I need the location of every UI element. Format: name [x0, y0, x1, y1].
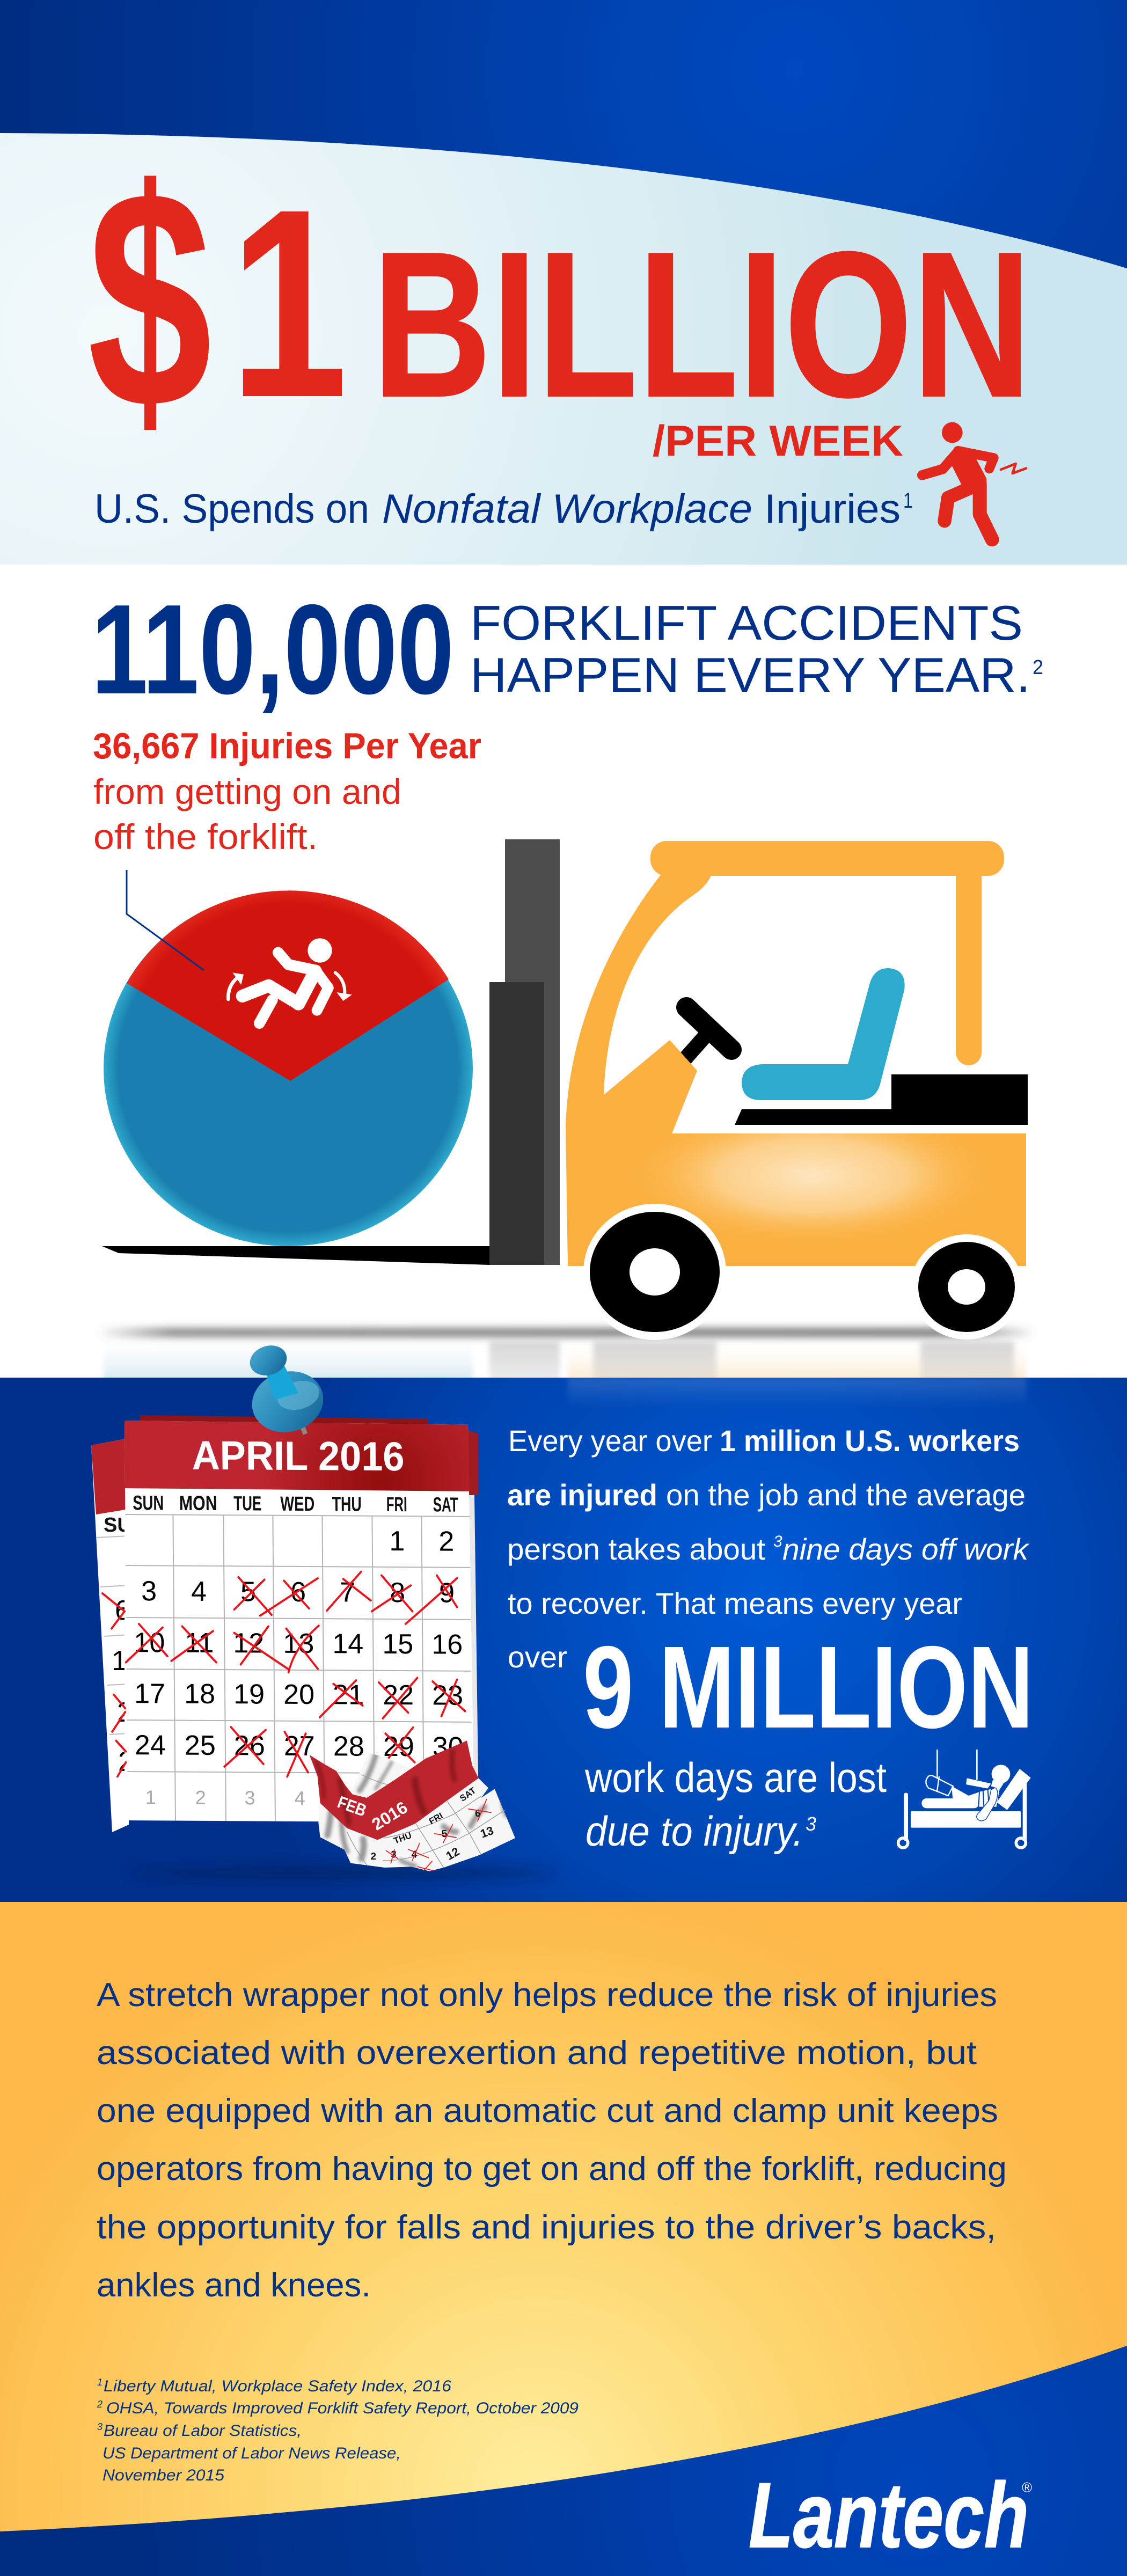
text: every year over 1 million workers: person takes about [507, 1532, 765, 1566]
crumpled page labels: 3 [391, 1849, 397, 1860]
text: every year over 1 million workers: Every year over [508, 1424, 712, 1458]
body text: A stretch wrapper not only helps reduce the risk of injuries [97, 1977, 997, 2014]
calendar dates: 12 [233, 1628, 264, 1659]
calendar dates: 10 [134, 1627, 165, 1658]
text: every year over 1 million workers: are injured [507, 1478, 657, 1512]
next month dates: 4 [294, 1787, 305, 1809]
text: U.S. spends on nonfatal workplace injuries: 1 [903, 489, 913, 513]
month header [125, 1421, 470, 1491]
icon: falling person [228, 938, 352, 1023]
crumpled paper [318, 1753, 515, 1871]
calendar dates: 14 [332, 1628, 363, 1660]
icon: patient in hospital bed [898, 1750, 1031, 1848]
weekday labels: FRI [386, 1494, 407, 1516]
footnotes [97, 2377, 579, 2484]
back calendar page: 27 [118, 1746, 149, 1777]
text: every year over 1 million workers: to recover. That means every year [508, 1586, 962, 1620]
calendar dates: 6 [290, 1577, 306, 1608]
heading: forklift accidents happen every year: 2 [1033, 656, 1043, 679]
panel: headline [0, 125, 1127, 565]
text: every year over 1 million workers: over [508, 1640, 567, 1674]
top banner background [0, 0, 1127, 301]
section background [0, 1902, 1127, 2576]
text: every year over 1 million workers: on the job and the average [666, 1478, 1026, 1512]
crumpled page labels: 13 [478, 1824, 495, 1841]
weekday labels: SUN [133, 1492, 164, 1514]
footnotes: Liberty Mutual, Workplace Safety Index, 2016 [104, 2377, 451, 2395]
body text: one equipped with an automatic cut and clamp unit keeps [97, 2092, 998, 2129]
calendar dates: 11 [185, 1628, 214, 1659]
calendar dates: 27 [284, 1731, 315, 1762]
calendar dates: 28 [333, 1731, 364, 1762]
front wheel [583, 1204, 726, 1340]
month title: APRIL 2016 [192, 1433, 405, 1480]
calendar dates: 29 [383, 1731, 414, 1762]
calendar dates: 18 [184, 1679, 215, 1710]
calendar [91, 1341, 515, 1871]
back calendar page [91, 1415, 479, 1832]
calendar dates: 5 [240, 1576, 256, 1607]
body highlight [655, 1133, 969, 1235]
text: every year over 1 million workers: 1 million U.S. workers [720, 1424, 1020, 1458]
crumpled page labels: 6 [475, 1807, 480, 1819]
calendar dates: 9 [439, 1578, 455, 1609]
body text: associated with overexertion and repetitive motion, but [97, 2035, 977, 2072]
text: work days are lost due to injury [584, 1754, 887, 1855]
calendar dates: 2 [438, 1526, 454, 1557]
panel: stretch wrapper [0, 1902, 1127, 2576]
red crosses [103, 1572, 465, 1777]
weekday labels [133, 1492, 458, 1517]
calendar dates: 21 [333, 1679, 364, 1711]
heading: forklift accidents happen every year: HAPPEN EVERY YEAR. [470, 648, 1030, 702]
calendar dates: 22 [383, 1680, 414, 1711]
body text: operators from having to get on and off the forklift, reducing [97, 2150, 1007, 2187]
panel: forklift section [93, 604, 1042, 1378]
heading: $1 BILLION [87, 125, 1031, 473]
text: work days are lost due to injury: due to injury. [586, 1807, 803, 1855]
rear wheel [911, 1234, 1022, 1340]
calendar dates: 20 [283, 1679, 314, 1710]
carriage [489, 982, 544, 1265]
footnotes: 1 [97, 2377, 103, 2388]
calendar dates: 16 [431, 1629, 463, 1660]
crumpled page labels: FRI [427, 1811, 445, 1826]
back calendar page: 13 [112, 1645, 143, 1677]
callout: 36,667 injuries per year: from getting on and [93, 772, 401, 811]
calendar shadow [129, 1868, 558, 1878]
bottom blue wave [0, 2346, 1127, 2576]
text: work days are lost due to injury: 3 [806, 1813, 816, 1835]
mast [505, 839, 560, 1265]
headline background [0, 133, 1127, 565]
floor shadow and reflections [97, 1328, 1036, 1385]
panel: lost work days [0, 1341, 1127, 1902]
paper folds [327, 1755, 506, 1866]
forks [102, 1246, 489, 1265]
footnotes: Bureau of Labor Statistics, [104, 2422, 302, 2440]
crumpled page labels: SAT [458, 1785, 478, 1804]
calendar dates: 1 [389, 1526, 405, 1557]
seat [742, 968, 905, 1100]
next month dates: 1 [145, 1786, 156, 1808]
calendar grid [125, 1514, 472, 1823]
red band [310, 1740, 479, 1840]
footnotes: 3 [97, 2421, 103, 2432]
calendar dates: 19 [233, 1679, 265, 1710]
body text: ankles and knees. [97, 2267, 371, 2304]
back calendar page: SUN [104, 1514, 147, 1536]
stat: 110,000: 110,000 [91, 579, 454, 721]
crumpled page labels: 5 [441, 1827, 448, 1839]
weekday labels: MON [179, 1492, 217, 1515]
crumpled February page [310, 1740, 515, 1871]
weekday labels: SAT [433, 1494, 458, 1517]
crumpled page labels [371, 1785, 495, 1863]
heading: forklift accidents happen every year: FORKLIFT ACCIDENTS [470, 596, 1023, 650]
section background [0, 1378, 1127, 1902]
section background [0, 565, 1127, 1378]
icon: injured running man [922, 422, 1026, 539]
heading: $1 BILLION: $ [87, 125, 212, 473]
logo: Lantech: ® [1022, 2479, 1032, 2496]
callout: 36,667 injuries per year: 36,667 Injuries Per Year [93, 726, 481, 766]
text: U.S. spends on nonfatal workplace injuries: Injuries [764, 486, 901, 532]
crumpled page crosses [386, 1799, 491, 1871]
weekday labels: TUE [233, 1492, 261, 1516]
body [566, 874, 1026, 1266]
text: U.S. spends on nonfatal workplace injuries: U.S. Spends on [94, 486, 369, 532]
crumpled page title: FEB [335, 1792, 369, 1820]
heading: forklift accidents happen every year [470, 596, 1043, 702]
crumpled page labels: THU [392, 1830, 413, 1846]
crumpled page labels: 4 [412, 1849, 418, 1860]
callout: 36,667 injuries per year: off the forklift. [93, 817, 318, 857]
calendar dates: 15 [382, 1629, 413, 1660]
footnotes: US Department of Labor News Release, [103, 2445, 401, 2462]
text: every year over 1 million workers: nine days off work [782, 1532, 1030, 1566]
text: every year over 1 million workers: 3 [773, 1533, 782, 1550]
crumpled page labels: 12 [444, 1845, 462, 1863]
heading: $1 BILLION: 1 [230, 153, 348, 453]
calendar dates: 25 [185, 1730, 216, 1761]
calendar dates: 3 [141, 1576, 157, 1607]
calendar dates: 4 [191, 1576, 207, 1607]
next month dates: 3 [244, 1787, 255, 1809]
back calendar page: 20 [117, 1697, 148, 1728]
next month dates [145, 1786, 305, 1809]
text: every year over 1 million workers [507, 1424, 1030, 1674]
calendar dates: 23 [432, 1680, 463, 1711]
logo: Lantech: Lantech [749, 2464, 1029, 2567]
reflection [568, 1378, 1026, 1407]
main calendar page [125, 1421, 474, 1823]
calendar dates: 26 [234, 1730, 265, 1762]
calendar dates: 30 [433, 1731, 464, 1763]
crumpled page title: 2016 [368, 1797, 411, 1834]
band shading [317, 1751, 455, 1823]
body text: the opportunity for falls and injuries to the driver’s backs, [97, 2209, 996, 2246]
footnotes: 2 [97, 2399, 103, 2410]
text: U.S. spends on nonfatal workplace injuries [94, 486, 913, 532]
next month dates: 2 [195, 1787, 206, 1809]
calendar dates: 13 [283, 1628, 314, 1659]
text: work days are lost due to injury: work days are lost [584, 1754, 887, 1801]
push pin [245, 1341, 330, 1440]
crumpled page title [335, 1792, 411, 1834]
footnotes: OHSA, Towards Improved Forklift Safety Report, October 2009 [106, 2399, 579, 2417]
text: U.S. spends on nonfatal workplace injuries: Nonfatal Workplace [382, 486, 752, 532]
leader line [127, 870, 204, 970]
calendar dates: 24 [135, 1730, 166, 1761]
footnotes: November 2015 [103, 2467, 224, 2484]
page [125, 1421, 474, 1823]
body text [97, 1977, 1007, 2304]
pie chart: one third red wedge [104, 890, 473, 1246]
weekday labels: THU [332, 1493, 362, 1516]
calendar dates: 7 [340, 1577, 355, 1608]
callout: 36,667 injuries per year [93, 726, 481, 857]
steering wheel [683, 1007, 731, 1062]
calendar dates: 17 [134, 1678, 165, 1709]
seat base [735, 1074, 1028, 1125]
subheading: per week: /PER WEEK [653, 417, 903, 465]
calendar dates: 8 [390, 1577, 405, 1608]
roof [650, 841, 1004, 876]
rear post [956, 864, 982, 1065]
back calendar page: 6 [115, 1595, 130, 1626]
paper grid [347, 1775, 504, 1868]
calendar dates [133, 1524, 464, 1763]
weekday labels: WED [280, 1493, 314, 1516]
crumpled page labels: 2 [371, 1850, 376, 1862]
forklift [102, 839, 1028, 1340]
